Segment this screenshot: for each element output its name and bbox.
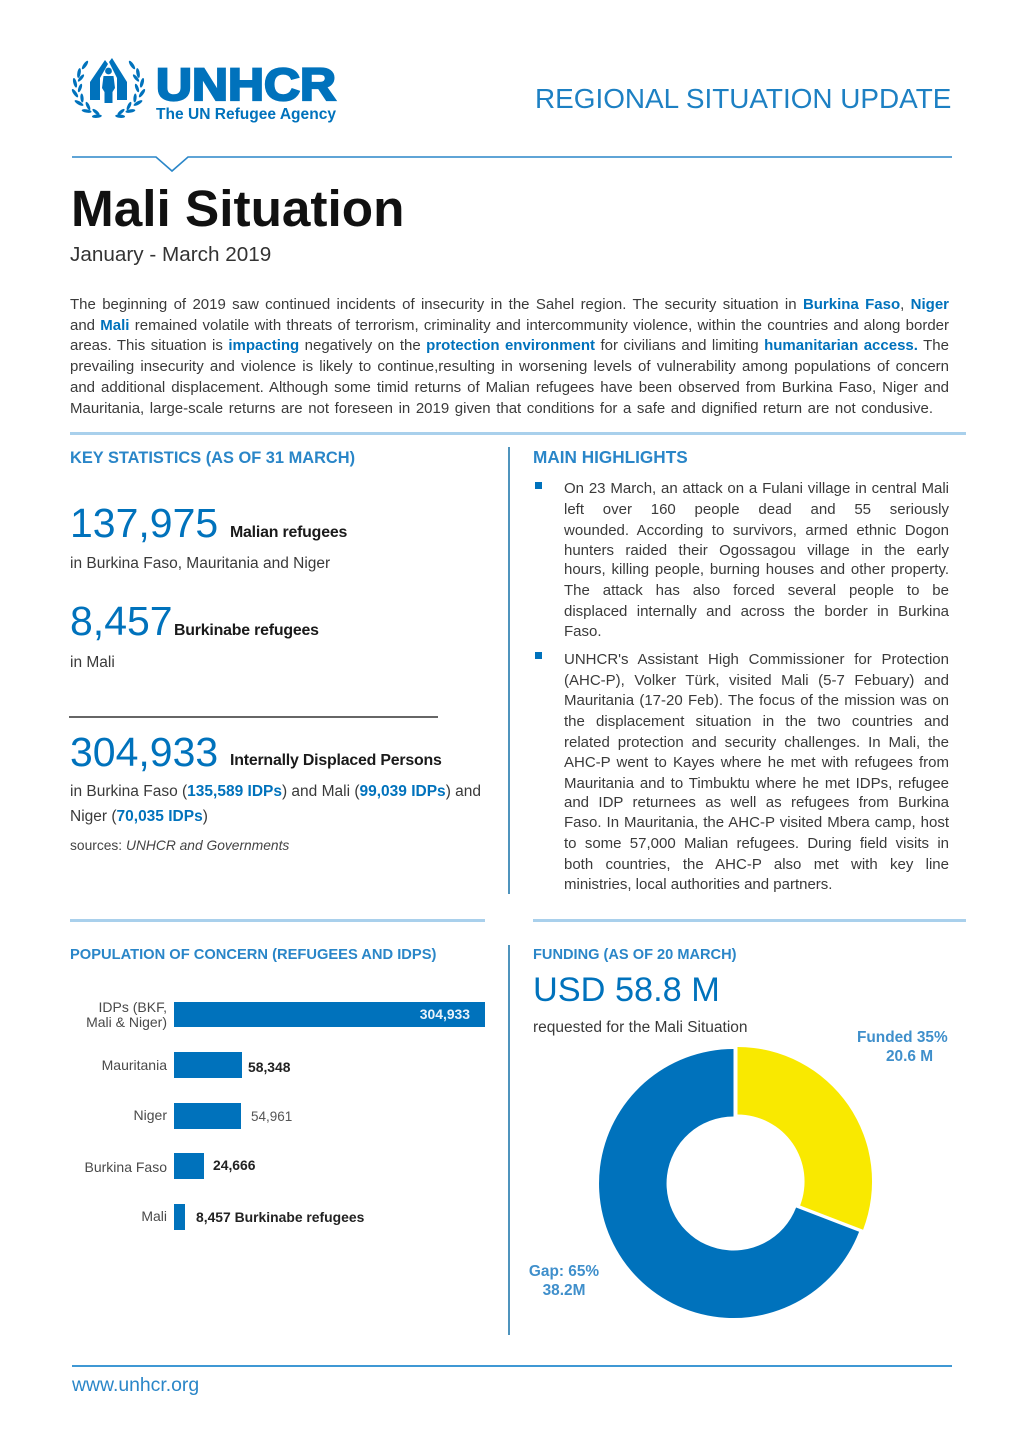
highlight: high commissioner visit: Mauritania (17-20 Feb). The focus of the mission was on [564, 692, 949, 709]
highlight: attack on village: wounded. According to survivors, armed ethnic Dogon [564, 522, 949, 539]
donut segment: gap [599, 1049, 859, 1318]
bar: Mali: 8,457 Burkinabe refugees [196, 1209, 364, 1225]
funding note: requested for the Mali Situation [533, 1019, 748, 1036]
highlight: high commissioner visit: both countries, the AHC-P also met with key line [564, 856, 949, 873]
logo: UNHCR [72, 58, 338, 123]
panel: funding [529, 947, 948, 1318]
label: gap: Gap: 65% [529, 1263, 599, 1280]
document type label: REGIONAL SITUATION UPDATE [535, 83, 951, 114]
logo tagline: The UN Refugee Agency [156, 106, 336, 123]
bar chart [85, 999, 485, 1230]
highlight: high commissioner visit: UNHCR's Assistant High Commissioner for Protection [564, 651, 949, 668]
icon: laurel wreath left [71, 60, 102, 118]
label: gap [529, 1263, 599, 1299]
note: refugee locations: in Burkina Faso, Mauritania and Niger [70, 555, 330, 572]
label: funded: Funded 35% [857, 1029, 948, 1046]
intro paragraph: Mauritania, large-scale returns are not foreseen in 2019 given that conditions for a safe and dignified return are not condusive. [70, 400, 933, 417]
icon: laurel wreath right [115, 60, 146, 118]
highlight: attack on village: Faso. [564, 623, 602, 640]
label: gap: 38.2M [543, 1282, 585, 1299]
logo wordmark: UNHCR [156, 59, 336, 110]
bar: Mali: Mali [141, 1208, 167, 1224]
intro paragraph: and Mali remained volatile with threats of terrorism, criminality and intercommunity violence, within the countries and along border [70, 317, 949, 334]
note: Mali: in Mali [70, 654, 115, 671]
stat: Malian refugees [70, 500, 347, 546]
note: IDP breakdown: Niger (70,035 IDPs) [70, 808, 208, 825]
highlight: attack on village [535, 480, 949, 640]
intro paragraph [70, 296, 949, 417]
stat: internally displaced persons: 304,933 [70, 729, 218, 775]
stat: internally displaced persons: Internally Displaced Persons [230, 752, 442, 769]
note: IDP breakdown [70, 783, 481, 825]
date range: January - March 2019 [70, 243, 271, 266]
bar: Mauritania [102, 1052, 290, 1078]
bar: Burkina Faso: Burkina Faso [85, 1159, 167, 1175]
highlight: attack on village: hours, killing people, burning houses and other property. [564, 561, 949, 578]
website link: www.unhcr.org [72, 1374, 199, 1396]
bar: Niger: 54,961 [251, 1109, 292, 1124]
bar: IDPs: Mali & Niger) [86, 1014, 167, 1030]
bar: Mauritania: Mauritania [102, 1057, 167, 1073]
highlight: high commissioner visit: related protection and security challenges. In Mali, the [564, 734, 949, 751]
highlight: high commissioner visit: (AHC-P), Volker Türk, visited Mali (5-7 Febuary) and [564, 672, 949, 689]
label: funded [857, 1029, 948, 1065]
bar: Mauritania: 58,348 [248, 1059, 290, 1075]
highlight: high commissioner visit: and IDP returnees as well as refugees from Burkina [564, 794, 949, 811]
funding total: USD 58.8 M [533, 971, 720, 1009]
header rule with notch [72, 156, 952, 172]
intro paragraph: and additional displacement. Although some timid returns of Malian refugees have been observed from Burkina Faso, Niger and [70, 379, 949, 396]
label: funded: 20.6 M [886, 1048, 933, 1065]
highlight: attack on village: On 23 March, an attack on a Fulani village in central Mali [564, 480, 949, 497]
highlight: high commissioner visit [535, 651, 949, 893]
heading: main highlights: MAIN HIGHLIGHTS [533, 447, 688, 467]
stat: internally displaced persons [70, 729, 442, 775]
panel: key statistics [69, 449, 481, 853]
highlight: high commissioner visit: the displacement situation in the two countries and [564, 713, 949, 730]
highlight: attack on village: displaced internally and across the border in Burkina [564, 603, 949, 620]
donut segment: funded [738, 1047, 872, 1230]
bar: Niger: Niger [134, 1107, 167, 1123]
heading: population of concern: POPULATION OF CONCERN (REFUGEES AND IDPS) [70, 947, 436, 963]
intro paragraph: The beginning of 2019 saw continued incidents of insecurity in the Sahel region. The security situation in Burkina Faso, Niger [70, 296, 949, 313]
donut chart [599, 1047, 872, 1318]
highlight: attack on village: hunters raided their Ogossagou village in the early [564, 542, 949, 559]
bar: IDPs: IDPs (BKF, [99, 999, 167, 1015]
stat: Burkinabe refugees: Burkinabe refugees [174, 622, 319, 639]
bar: Mali [141, 1204, 364, 1230]
intro paragraph: areas. This situation is impacting negatively on the protection environment for civilians and limiting humanitarian access. The [70, 337, 949, 354]
panel: population of concern [70, 947, 485, 1230]
intro paragraph: prevailing insecurity and violence is likely to continue,resulting in worsening levels of vulnerability among populations of concern [70, 358, 949, 375]
heading: key statistics: KEY STATISTICS (AS OF 31 MARCH) [70, 449, 355, 467]
stat: Burkinabe refugees: 8,457 [70, 598, 173, 644]
highlight: high commissioner visit: to some 57,000 Malian refugees. During field visits in [564, 835, 949, 852]
highlight: high commissioner visit: Mauritania and to Timbuktu where he met IDPs, refugee [564, 775, 949, 792]
highlight: high commissioner visit: ministries, local authorities and partners. [564, 876, 832, 893]
highlight: high commissioner visit: AHC-P went to Kayes where he met with refugees from [564, 754, 949, 771]
bar: Burkina Faso [85, 1153, 256, 1179]
heading: funding: FUNDING (AS OF 20 MARCH) [533, 947, 737, 963]
title: Mali Situation [71, 180, 404, 237]
highlight: high commissioner visit: Faso. In Mauritania, the AHC-P visited Mbera camp, host [564, 814, 949, 831]
highlight: attack on village: left over 160 people dead and 55 seriously [564, 501, 949, 518]
bar: IDPs: 304,933 [420, 1006, 470, 1022]
stat: Burkinabe refugees [70, 598, 319, 644]
bar: IDPs [86, 999, 485, 1030]
bar: Burkina Faso: 24,666 [213, 1157, 256, 1173]
stat: Malian refugees: 137,975 [70, 500, 218, 546]
highlight: attack on village: The attack has also forced several people to be [564, 582, 949, 599]
panel: main highlights [533, 447, 949, 893]
note: IDP breakdown: in Burkina Faso (135,589 IDPs) and Mali (99,039 IDPs) and [70, 783, 481, 800]
bar: Niger [134, 1103, 292, 1129]
sources: sources: UNHCR and Governments [70, 838, 289, 853]
stat: Malian refugees: Malian refugees [230, 524, 347, 541]
icon: hands sheltering figure [90, 58, 127, 103]
